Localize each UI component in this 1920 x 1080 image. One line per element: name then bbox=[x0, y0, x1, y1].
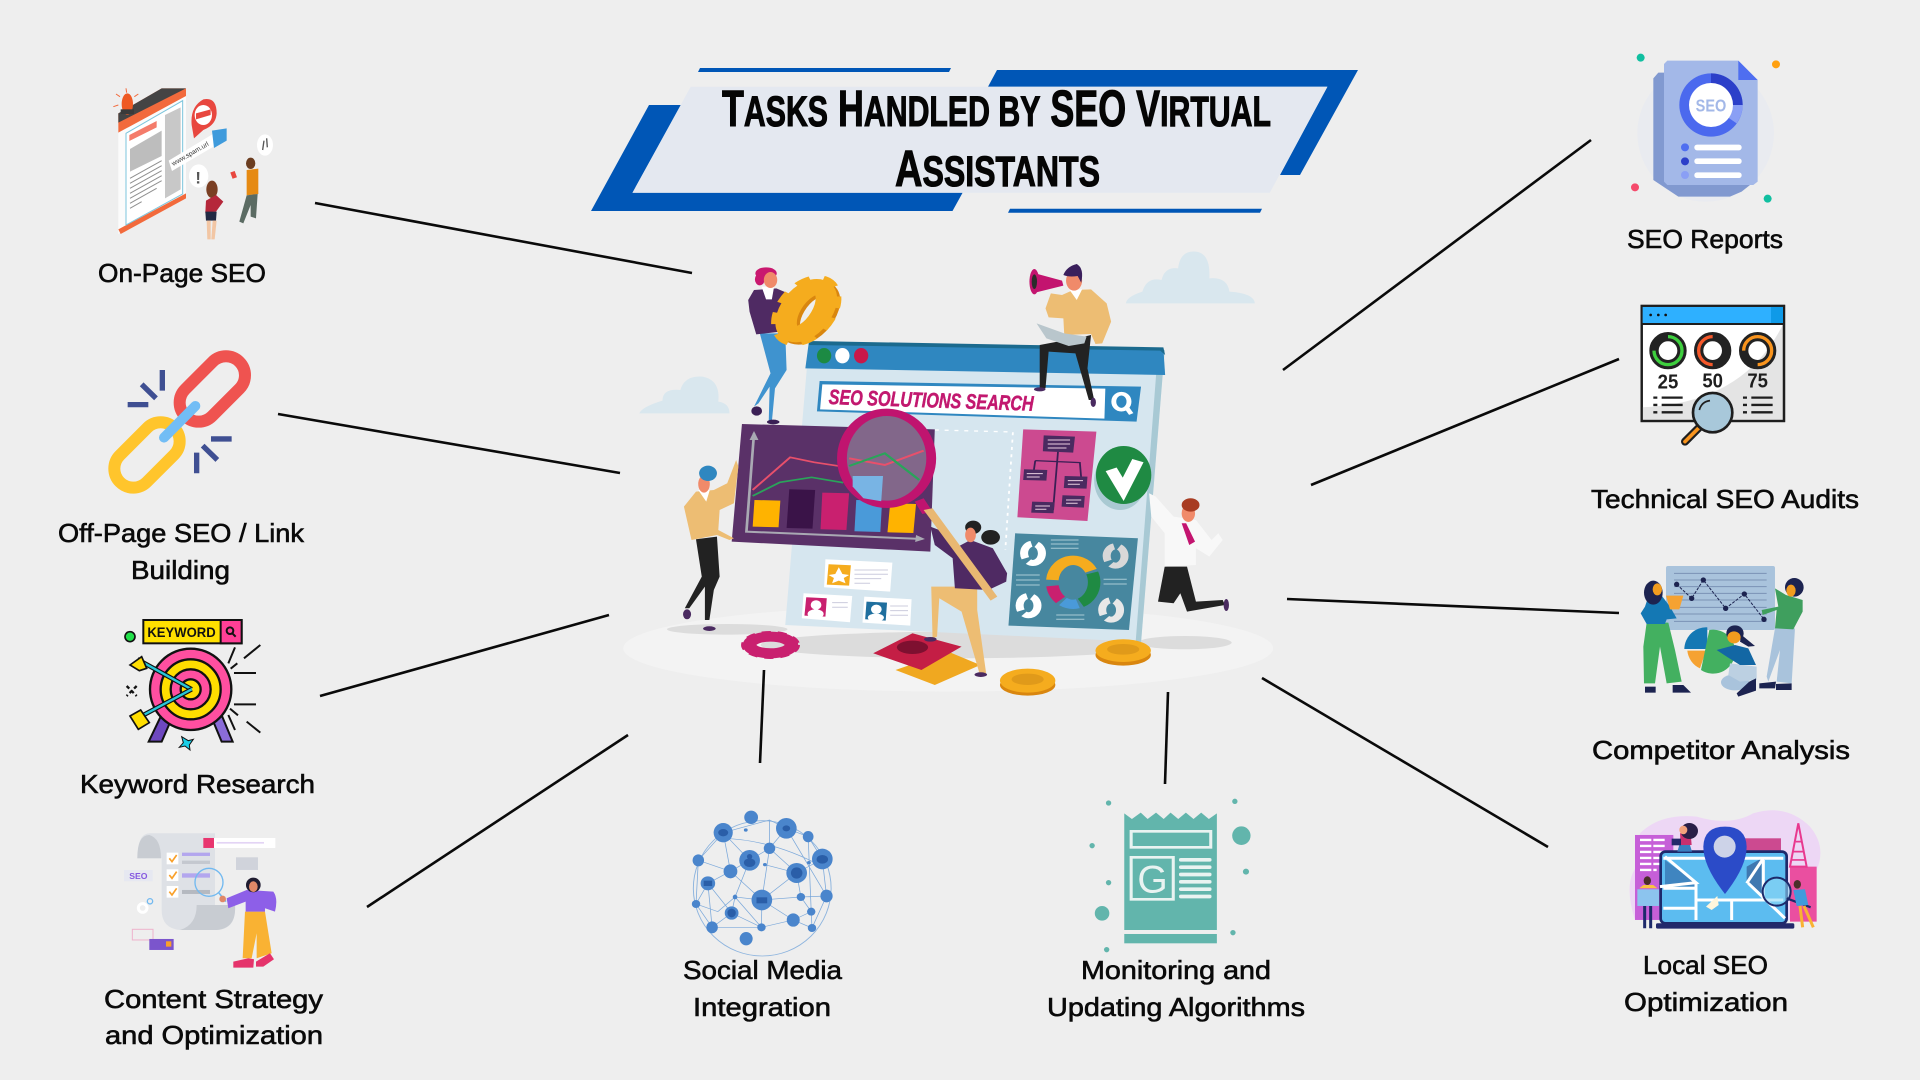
G box: G bbox=[1137, 858, 1168, 901]
label: Local SEO Optimization: Optimization bbox=[1624, 987, 1788, 1017]
gauge values: 25 bbox=[1658, 371, 1678, 393]
connector lines bbox=[278, 140, 1619, 907]
headline box bbox=[1131, 831, 1211, 847]
exclamation bubble bbox=[189, 164, 208, 188]
woman with laptop bbox=[1672, 823, 1698, 852]
label: Off-Page SEO / Link Building: Building bbox=[131, 555, 230, 585]
sparkles bbox=[127, 686, 193, 750]
yellow link bbox=[106, 414, 188, 495]
siren bbox=[113, 88, 138, 115]
document scroll bbox=[137, 833, 235, 930]
keyword bar: KEYWORD bbox=[147, 624, 216, 640]
title line 2: ASSISTANTS bbox=[895, 140, 1100, 197]
page fold bbox=[1738, 61, 1758, 80]
dotted backdrop bbox=[1637, 65, 1774, 202]
label: Off-Page SEO / Link Building: Off-Page SEO / Link bbox=[58, 518, 305, 548]
donut chart bbox=[1679, 73, 1743, 137]
pink gear bbox=[744, 633, 797, 657]
woman left bbox=[1641, 581, 1691, 693]
label: Monitoring and Updating Algorithms: Updating Algorithms bbox=[1047, 992, 1305, 1022]
label: Content Strategy and Optimization bbox=[104, 984, 323, 1050]
icon: keyword target bbox=[125, 620, 260, 750]
label: Technical SEO Audits: Technical SEO Audits bbox=[1591, 484, 1859, 514]
label: On-Page SEO: On-Page SEO bbox=[98, 258, 266, 288]
accent dots bbox=[1631, 54, 1780, 203]
web page bbox=[118, 88, 186, 234]
clouds bbox=[639, 252, 1255, 413]
review cards bbox=[802, 559, 912, 626]
label: SEO Reports: SEO Reports bbox=[1627, 224, 1783, 254]
SEO tag bbox=[124, 870, 153, 881]
magnifier bbox=[1685, 393, 1732, 442]
receipt body bbox=[1124, 813, 1217, 930]
man with map bbox=[1637, 876, 1659, 928]
title line 1: TASKS HANDLED BY SEO VIRTUAL bbox=[722, 80, 1271, 137]
central SEO illustration bbox=[623, 252, 1273, 696]
gold coins bbox=[1000, 639, 1151, 696]
icon: local SEO map bbox=[1630, 810, 1820, 929]
arrows bbox=[130, 657, 192, 729]
network nodes bbox=[692, 811, 833, 945]
magnifier bbox=[195, 868, 226, 902]
label: Off-Page SEO / Link Building bbox=[58, 518, 305, 585]
pie chart bbox=[1684, 627, 1735, 674]
laptop map bbox=[1656, 852, 1794, 929]
man right bbox=[1759, 578, 1804, 690]
scattered dots bbox=[1089, 799, 1251, 952]
pink org chart panel bbox=[1017, 429, 1096, 521]
spark dashes bbox=[128, 370, 232, 473]
banner top rule bbox=[698, 68, 951, 72]
red and yellow tiles bbox=[873, 633, 980, 685]
person with megaphone bbox=[1029, 264, 1111, 407]
label: Social Media Integration: Social Media bbox=[683, 955, 843, 985]
stop sign bbox=[191, 99, 217, 138]
gauge values: 50 bbox=[1702, 371, 1723, 393]
url bar bbox=[169, 128, 227, 171]
label: Local SEO Optimization: Local SEO bbox=[1643, 950, 1768, 980]
joining bar bbox=[164, 406, 195, 438]
ground shadows bbox=[667, 624, 1232, 658]
donut chart: SEO bbox=[1696, 95, 1726, 115]
label: Content Strategy and Optimization: and Optimization bbox=[105, 1020, 323, 1050]
label: Social Media Integration: Integration bbox=[693, 992, 831, 1022]
red link bbox=[172, 348, 253, 430]
SEO tag: SEO bbox=[129, 871, 148, 881]
search bar bbox=[817, 381, 1141, 422]
small gears and cards bbox=[132, 899, 174, 950]
stand legs bbox=[149, 716, 233, 742]
browser window bbox=[785, 341, 1165, 643]
network links bbox=[696, 820, 827, 928]
globe outline bbox=[693, 821, 831, 956]
icon: on-page SEO bbox=[113, 88, 273, 239]
back sheet bbox=[1653, 73, 1750, 197]
green check badge bbox=[1094, 446, 1151, 510]
icon: social network globe bbox=[692, 811, 833, 956]
man bbox=[230, 134, 273, 223]
icon: SEO report bbox=[1631, 54, 1780, 203]
teal donut dashboard panel bbox=[1008, 533, 1138, 630]
icon: Google news document bbox=[1089, 799, 1251, 952]
person with gear bbox=[748, 267, 849, 424]
jumping man bbox=[1149, 493, 1229, 612]
banner light panel bbox=[632, 87, 1327, 193]
list rows bbox=[1681, 143, 1742, 179]
front sheet bbox=[1664, 61, 1758, 185]
label: Content Strategy and Optimization: Content Strategy bbox=[104, 984, 323, 1014]
search field bbox=[203, 838, 275, 870]
gauge values: 75 bbox=[1747, 371, 1768, 393]
magnifying glass bbox=[842, 412, 933, 514]
icon: competitor analysis team bbox=[1641, 566, 1804, 697]
left building bbox=[1635, 835, 1673, 920]
exclamation bubble: ! bbox=[195, 168, 201, 187]
gauge values bbox=[1658, 371, 1768, 393]
woman bbox=[219, 878, 276, 968]
ground ellipse bbox=[623, 605, 1273, 692]
text lines bbox=[1179, 858, 1212, 898]
checklist bbox=[167, 853, 210, 898]
label: Monitoring and Updating Algorithms bbox=[1047, 955, 1305, 1022]
receipt foot bbox=[1124, 934, 1217, 943]
gauges bbox=[1654, 337, 1772, 365]
crouching woman bbox=[1717, 625, 1757, 697]
banner bottom rule bbox=[1008, 209, 1262, 213]
woman with magnifier bbox=[924, 508, 1007, 677]
green dot bbox=[125, 632, 135, 642]
icon: technical audit window bbox=[1642, 306, 1784, 442]
chart board bbox=[1666, 566, 1775, 630]
banner left blue frame bbox=[591, 105, 963, 211]
lilac blobs bbox=[1630, 810, 1820, 920]
label: Monitoring and Updating Algorithms: Monitoring and bbox=[1081, 955, 1271, 985]
title banner bbox=[591, 68, 1358, 213]
purple chart panel bbox=[732, 424, 935, 552]
icon: content strategy bbox=[124, 833, 276, 968]
banner right blue frame bbox=[988, 70, 1358, 175]
url bar: www.spam.url bbox=[170, 141, 211, 168]
icon: broken chain link bbox=[106, 348, 253, 495]
target rings bbox=[150, 649, 231, 730]
label: Competitor Analysis: Competitor Analysis bbox=[1592, 735, 1850, 765]
person holding chart bbox=[683, 460, 738, 631]
location pin bbox=[1703, 827, 1747, 910]
label: Social Media Integration bbox=[683, 955, 843, 1022]
label: Local SEO Optimization bbox=[1624, 950, 1788, 1017]
rays bbox=[228, 645, 260, 733]
woman bbox=[205, 181, 223, 239]
window frame bbox=[1642, 306, 1784, 421]
list marks bbox=[1653, 398, 1773, 412]
label: Keyword Research: Keyword Research bbox=[80, 769, 315, 799]
node symbols bbox=[704, 825, 828, 917]
right tower bbox=[1745, 823, 1817, 922]
search bar: SEO SOLUTIONS SEARCH bbox=[828, 386, 1035, 416]
man with magnifier bbox=[1763, 878, 1813, 927]
